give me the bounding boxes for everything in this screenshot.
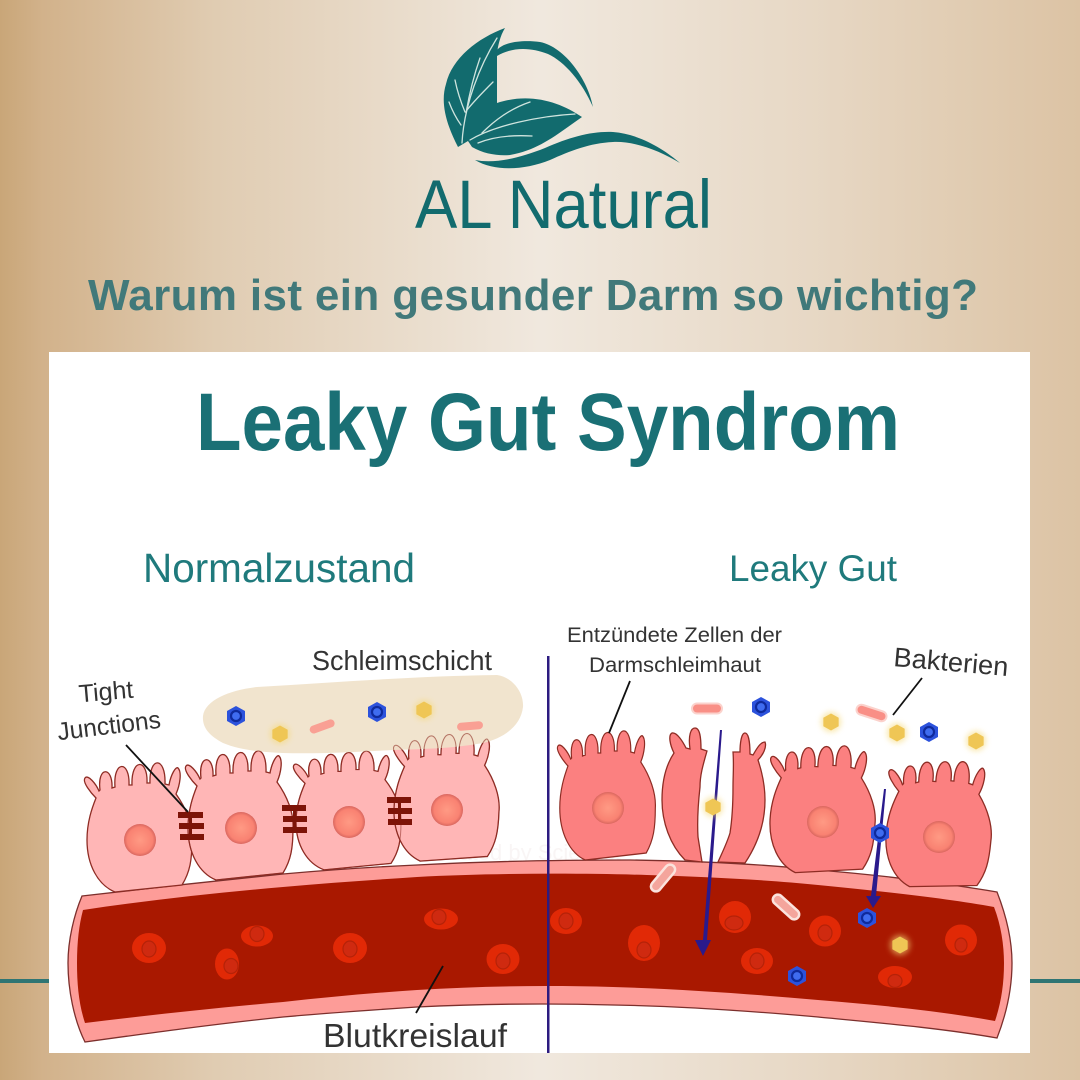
yellow bacterium [887, 723, 907, 743]
junction 3 [387, 797, 412, 825]
cell 2 [185, 751, 293, 880]
heading: Normalzustand: Normalzustand [143, 545, 415, 591]
logo wordmark: AL Natural [415, 166, 712, 243]
watermark: Created by Scientist [424, 840, 621, 865]
red blood cells [132, 901, 977, 988]
label: Entzündete Zellen der: Entzündete Zellen der [567, 623, 782, 647]
pink rod [457, 721, 483, 731]
cell 3 [293, 751, 401, 870]
title: Leaky Gut Syndrom [196, 377, 900, 468]
yellow bacterium [966, 731, 986, 751]
labels [56, 623, 1010, 1054]
cell D [879, 755, 998, 893]
cell C [765, 742, 879, 877]
blood cell centres [142, 910, 967, 988]
heading: Leaky Gut: Leaky Gut [729, 548, 898, 589]
heading: question: Warum ist ein gesunder Darm so wichtig? [88, 271, 978, 320]
tight junctions [178, 797, 412, 840]
yellow bacterium [890, 935, 910, 955]
cell 4 [390, 731, 502, 864]
blue bacterium [368, 702, 386, 722]
label: Junctions: Junctions [56, 706, 162, 746]
label: Tight: Tight [78, 676, 134, 708]
icon: leaves [444, 28, 680, 168]
left accent line [0, 979, 50, 983]
leader: tight junctions [126, 745, 188, 812]
pink rod [692, 704, 722, 714]
blue bacterium [788, 966, 806, 986]
yellow bacterium [703, 797, 723, 817]
pink rod [309, 718, 336, 735]
arrow: bacteria crossing the gap [695, 730, 722, 956]
blue bacterium [858, 908, 876, 928]
leader: blood circulation [416, 966, 443, 1013]
leader: bacteria [893, 678, 922, 715]
label: Blutkreislauf: Blutkreislauf [323, 1017, 508, 1054]
blood vessel [68, 860, 1012, 1042]
villi overlay of normal cells [185, 731, 502, 880]
label: Darmschleimhaut: Darmschleimhaut [589, 653, 761, 677]
arrow: bacteria crossing between cells [866, 789, 886, 908]
bacteria in mucus [227, 700, 483, 744]
split cell right [718, 733, 766, 863]
rod in vessel [649, 863, 677, 893]
right accent line [1030, 979, 1080, 983]
cell A [557, 731, 655, 860]
logo: AL Natural [415, 28, 712, 243]
yellow bacterium [270, 724, 290, 744]
blue bacterium [871, 823, 889, 843]
blue bacterium [752, 697, 770, 717]
split cell left [662, 728, 707, 862]
label: Schleimschicht: Schleimschicht [312, 645, 492, 676]
rod in vessel [771, 893, 801, 921]
vessel wall [68, 860, 1012, 1042]
leaked bacteria [649, 697, 986, 986]
leader: inflamed cells [609, 681, 630, 733]
vessel lumen [77, 874, 1004, 1023]
yellow bacterium [414, 700, 434, 720]
junction 1 [178, 812, 204, 840]
cell 1 [84, 763, 192, 892]
junction 2 [282, 805, 307, 833]
panel: white diagram card [49, 352, 1030, 1053]
leader lines [126, 678, 922, 1013]
blue bacterium [920, 722, 938, 742]
inflamed epithelial cells [557, 728, 998, 893]
mucus layer [203, 675, 523, 753]
label: Bakterien: Bakterien [892, 642, 1010, 682]
blue bacterium [227, 706, 245, 726]
pink rod [855, 703, 888, 723]
yellow bacterium [821, 712, 841, 732]
normal epithelial cells [84, 731, 502, 892]
divider line [547, 656, 550, 1053]
icon: leaf veins [449, 38, 575, 143]
